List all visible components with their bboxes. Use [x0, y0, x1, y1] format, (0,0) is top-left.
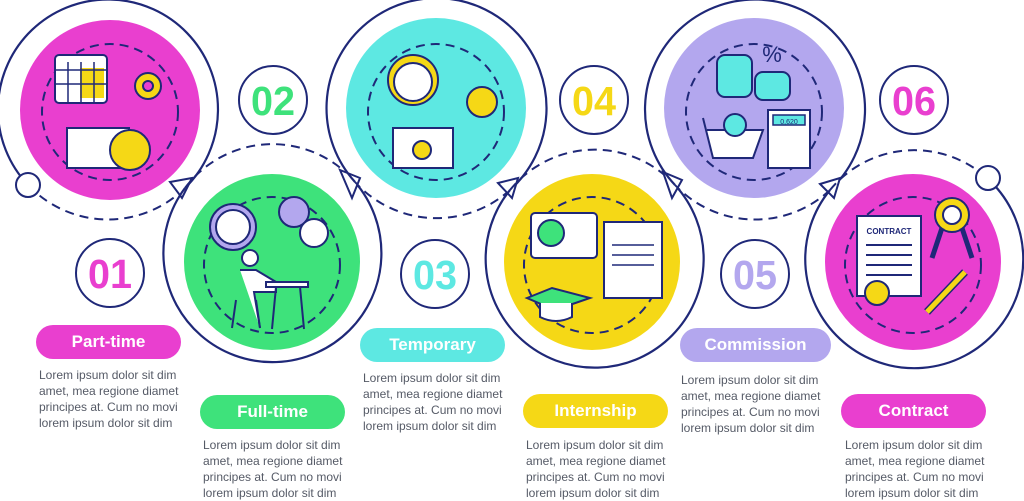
icon: contract, medal, pen: CONTRACT: [867, 227, 912, 236]
number 03: 03: [413, 252, 457, 298]
label: Part-time: [36, 325, 181, 359]
panel 4 circle: internship: [486, 150, 704, 368]
number 02: 02: [251, 78, 295, 124]
icon: worker at desk: [210, 197, 328, 329]
icon: id card, diploma, cap: [527, 213, 662, 321]
label: Contract: [841, 394, 986, 428]
number 04: 04: [572, 78, 616, 124]
label: Full-time: [200, 395, 345, 429]
number 02: [239, 66, 307, 134]
label: Internship: Internship: [554, 401, 637, 420]
number 01: 01: [88, 251, 132, 297]
panel 1 circle: part-time: [0, 0, 218, 219]
panel 6 circle: contract: [805, 150, 1023, 368]
number 06: 06: [892, 78, 936, 124]
icon: coins, cart, calculator: 0,620: [780, 119, 798, 126]
number 06: [880, 66, 948, 134]
icon: coins, cart, calculator: [703, 42, 810, 168]
label: Contract: Contract: [879, 401, 948, 420]
number 01: [76, 239, 144, 307]
text block 2: Lorem ipsum dolor sit dim amet, mea regione diamet principes at. Cum no movi lorem ipsum dolor sit dim: [203, 438, 342, 500]
label: Part-time: Part-time: [72, 332, 145, 351]
label: Temporary: [360, 328, 505, 362]
label: Commission: [680, 328, 831, 362]
text block 3: Lorem ipsum dolor sit dim amet, mea regione diamet principes at. Cum no movi lorem ipsum dolor sit dim: [363, 371, 502, 433]
label: Full-time: Full-time: [237, 402, 308, 421]
icon: coins, cart, calculator: %: [762, 42, 782, 67]
icon: contract, medal, pen: [857, 198, 972, 312]
number 05: [721, 240, 789, 308]
icon: clock, briefcase, team: [388, 55, 497, 168]
text block 6: Lorem ipsum dolor sit dim amet, mea regione diamet principes at. Cum no movi lorem ipsum dolor sit dim: [845, 438, 984, 500]
text block 5: Lorem ipsum dolor sit dim amet, mea regione diamet principes at. Cum no movi lorem ipsum dolor sit dim: [681, 373, 820, 435]
number 03: [401, 240, 469, 308]
panel 5 circle: commission: [645, 0, 865, 220]
icon: calendar briefcase clock gear: [55, 55, 161, 170]
label: Temporary: Temporary: [389, 335, 476, 354]
text block 4: Lorem ipsum dolor sit dim amet, mea regione diamet principes at. Cum no movi lorem ipsum dolor sit dim: [526, 438, 665, 500]
text block 1: Lorem ipsum dolor sit dim amet, mea regione diamet principes at. Cum no movi lorem ipsum dolor sit dim: [39, 368, 178, 430]
number 04: [560, 66, 628, 134]
number 05: 05: [733, 252, 777, 298]
panel 2 circle: full-time: [163, 144, 381, 362]
label: Internship: [523, 394, 668, 428]
label: Commission: Commission: [704, 335, 807, 354]
panel 3 circle: temporary: [327, 0, 547, 218]
